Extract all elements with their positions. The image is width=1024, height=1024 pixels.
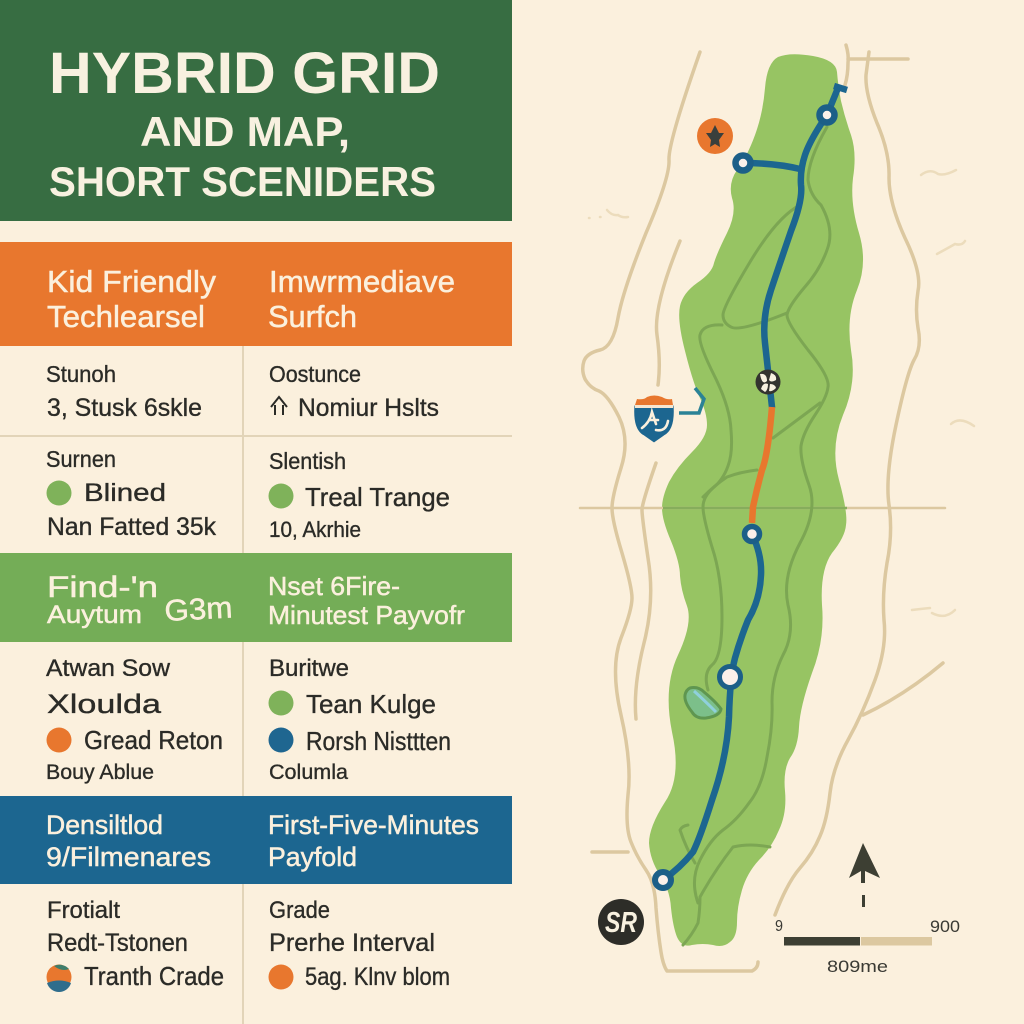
panel: first row right: Oostunce xyxy=(269,361,361,387)
icon: orange dot xyxy=(46,728,72,752)
icon: highway shield xyxy=(634,396,674,443)
green header band: G3m xyxy=(164,591,233,628)
panel: fourth row left: Tranth Crade xyxy=(84,961,224,991)
panel: third row right: Columla xyxy=(269,761,348,784)
blue header band: 9/Filmenares xyxy=(46,842,211,872)
blue header band: Densiltlod xyxy=(46,810,163,840)
icon: start badge xyxy=(598,899,644,945)
trails xyxy=(680,127,830,945)
panel: first row left xyxy=(46,361,202,422)
panel: fourth row left xyxy=(46,897,224,992)
panel: fourth row right xyxy=(268,897,450,991)
map xyxy=(580,45,974,976)
panel: second row left xyxy=(46,446,216,541)
route nodes xyxy=(655,108,834,888)
icon: orange star marker xyxy=(697,118,733,154)
terrain marks xyxy=(589,170,974,616)
panel: second row left: Blined xyxy=(84,479,166,507)
title text: SHORT SCENIDERS xyxy=(49,158,436,205)
panel: second row left: Surnen xyxy=(46,446,116,472)
green header band xyxy=(0,553,512,642)
panel: third row right xyxy=(268,655,451,784)
orange header band: Imwrmediave xyxy=(269,264,455,299)
panel: third row right: Rorsh Nisttten xyxy=(306,726,451,756)
lake xyxy=(685,688,721,718)
main route blue lower xyxy=(663,534,761,880)
icon: orange dot xyxy=(268,964,294,990)
panel: third row right: Buritwe xyxy=(269,655,349,682)
icon: junction badge xyxy=(756,370,780,394)
panel: third row left: Atwan Sow xyxy=(46,655,171,682)
icon: green dot xyxy=(268,484,294,508)
icon: blue dot xyxy=(268,728,294,752)
blue header band: Payfold xyxy=(268,842,357,872)
green header band: Minutest Payvofr xyxy=(268,600,465,630)
panel: second row left: Nan Fatted 35k xyxy=(47,513,216,541)
panel: first row left: 3, Stusk 6skle xyxy=(47,394,202,422)
green header band: Auytum xyxy=(47,601,142,629)
main route blue upper xyxy=(764,115,827,407)
scale bar: 809me xyxy=(827,957,888,976)
icon: mixed dot xyxy=(46,964,72,992)
shield connector xyxy=(679,388,704,413)
icon: up arrow xyxy=(271,397,287,415)
panel: fourth row left: Frotialt xyxy=(47,897,120,924)
icon: green dot xyxy=(268,690,294,716)
title banner xyxy=(0,0,512,221)
panel: third row left: Xloulda xyxy=(47,689,162,719)
panel: fourth row right: Grade xyxy=(269,897,330,924)
route orange section xyxy=(752,407,772,523)
panel: second row right: Slentish xyxy=(269,448,346,474)
panel: third row left xyxy=(46,655,223,784)
title text: HYBRID GRID xyxy=(49,41,440,106)
title text xyxy=(49,41,440,205)
panel: fourth row right: 5ag. Klnv blom xyxy=(305,963,450,991)
panel: third row left: Gread Reton xyxy=(84,725,223,755)
panel: second row right: Treal Trange xyxy=(305,482,450,512)
orange header band: Techlearsel xyxy=(47,299,205,334)
scale bar xyxy=(775,917,960,976)
green header band: Find-'n xyxy=(47,571,158,604)
scale bar: 900 xyxy=(930,917,960,936)
panel: second row right: 10, Akrhie xyxy=(269,517,361,542)
panel: third row right: Tean Kulge xyxy=(306,689,436,719)
orange header band xyxy=(0,242,512,346)
panel: third row left: Bouy Ablue xyxy=(46,761,154,784)
panel: first row right: Nomiur Hslts xyxy=(298,394,439,422)
north arrow xyxy=(849,843,880,907)
icon: start badge: SR xyxy=(605,907,637,939)
orange header band: Kid Friendly xyxy=(47,264,217,299)
tan roads xyxy=(580,45,945,971)
shaded road across park xyxy=(663,507,847,509)
route branch xyxy=(743,163,800,169)
icon: green dot xyxy=(46,480,72,506)
orange header band: Surfch xyxy=(268,299,357,334)
blue header band: First-Five-Minutes xyxy=(268,810,479,840)
panel: second row right xyxy=(268,448,450,542)
green header band: Nset 6Fire- xyxy=(268,571,400,601)
panel: first row left: Stunoh xyxy=(46,361,116,387)
park area xyxy=(649,54,863,946)
panel: fourth row right: Prerhe Interval xyxy=(269,929,435,957)
scale bar: 9 xyxy=(775,918,783,935)
panel: first row right xyxy=(269,361,439,422)
grid dividers xyxy=(0,346,512,1024)
title text: AND MAP, xyxy=(140,108,350,155)
route top flag xyxy=(827,86,847,115)
panel: fourth row left: Redt-Tstonen xyxy=(47,929,188,957)
blue header band xyxy=(0,796,512,884)
